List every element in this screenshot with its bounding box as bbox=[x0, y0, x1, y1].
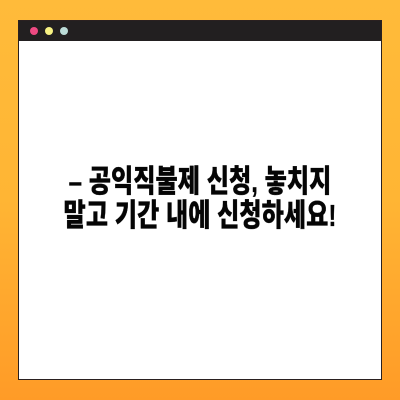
title bbox=[64, 164, 336, 233]
title: 말고 기간 내에 신청하세요! bbox=[64, 198, 336, 233]
title bar bbox=[19, 21, 381, 41]
icon: pink window dot bbox=[30, 27, 38, 35]
title: – 공익직불제 신청, 놓치지 bbox=[69, 164, 331, 199]
icon: yellow window dot bbox=[45, 27, 53, 35]
icon: pale blue window dot bbox=[60, 27, 68, 35]
